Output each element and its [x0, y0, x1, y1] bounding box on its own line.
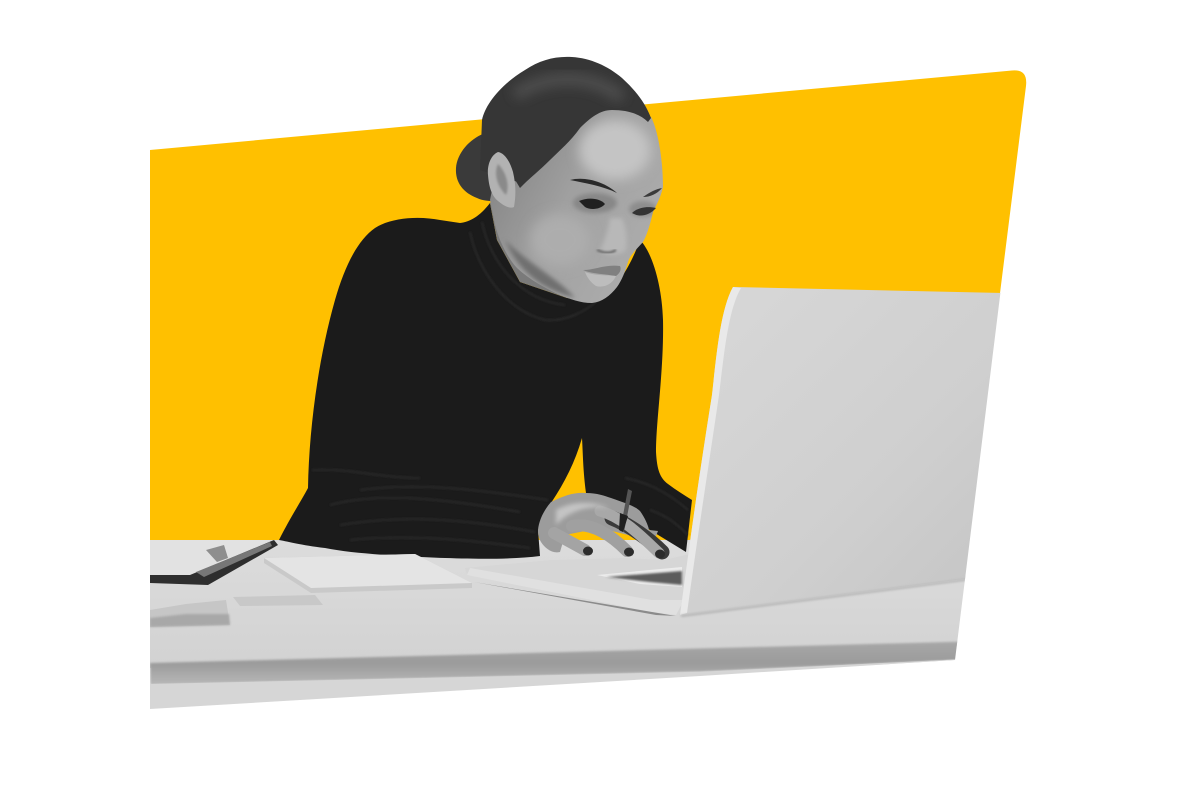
neck: [490, 170, 610, 300]
illustration: woman at laptop on yellow panel: [150, 56, 1026, 709]
table: [150, 540, 990, 712]
notebook: [264, 554, 472, 593]
fingers: [554, 511, 662, 553]
clipboard: [150, 540, 278, 585]
hair beside the ear: [506, 150, 524, 188]
small papers: [150, 595, 323, 627]
laptop lid: [680, 287, 1003, 617]
hair: [481, 56, 651, 184]
laptop base: [465, 554, 690, 616]
eyes and brows: [570, 179, 662, 215]
sweater: [279, 203, 692, 559]
hand with pen: [538, 489, 665, 558]
ear: [488, 152, 515, 208]
sweater wrinkles and collar folds: [312, 222, 688, 548]
face: [490, 110, 663, 303]
nose and lips: [583, 250, 621, 287]
panel: yellow background: [150, 70, 1026, 580]
bun: [456, 134, 500, 201]
